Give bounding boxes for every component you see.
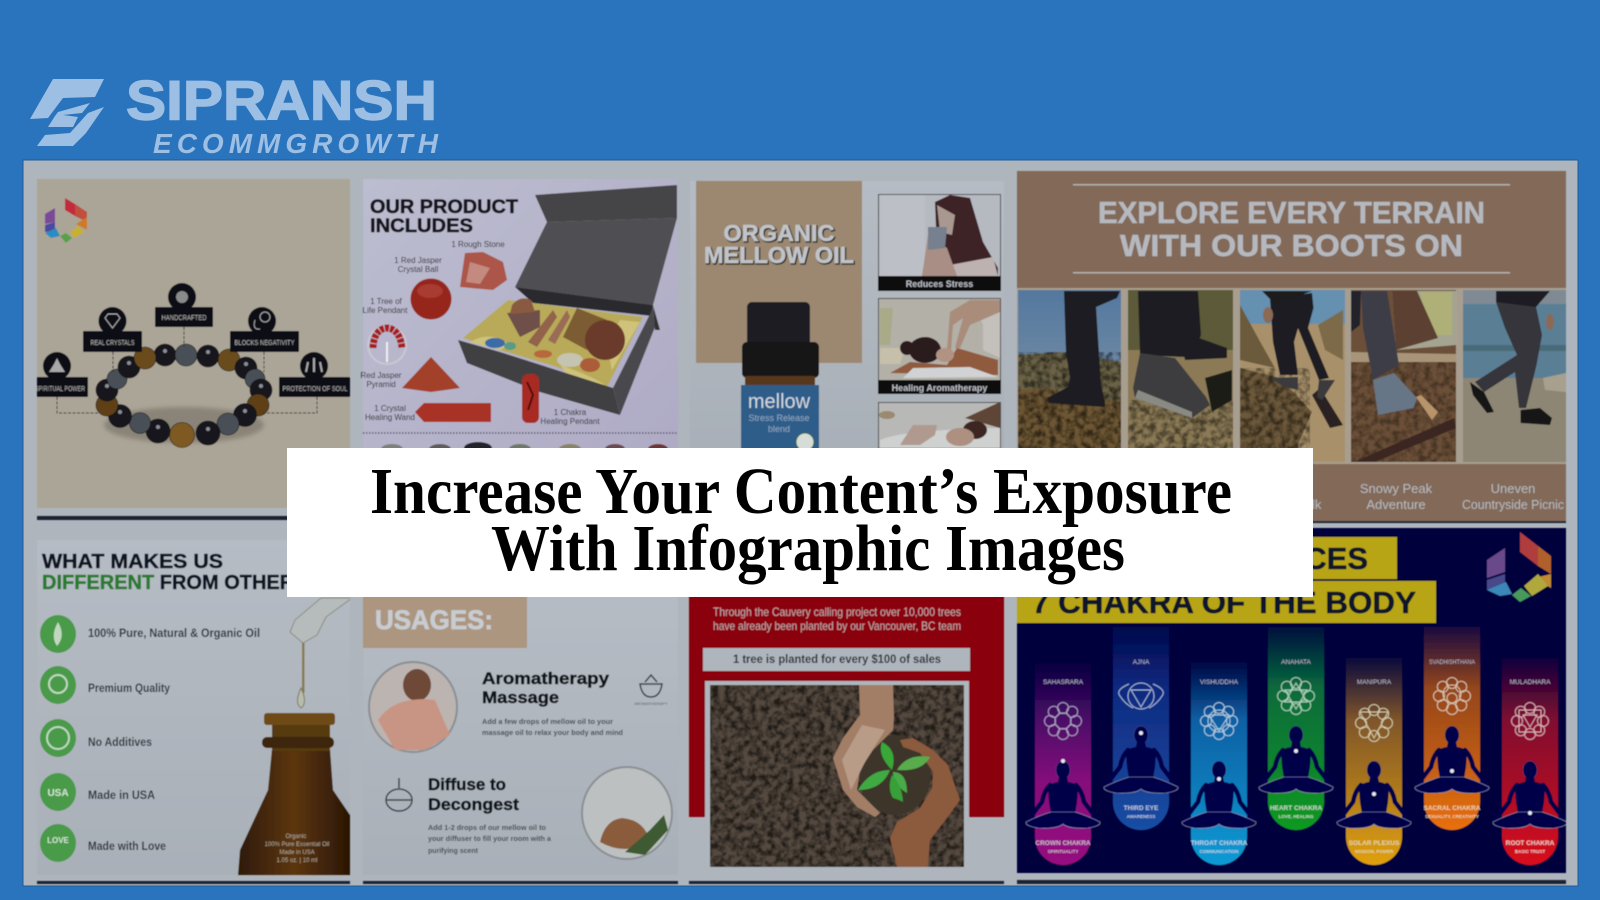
divider: tile 7 underline: [689, 881, 1004, 884]
heading: MELLOW OIL: [704, 242, 854, 268]
banner: yellow top: CES: [1304, 541, 1368, 576]
feature: made with love: [40, 824, 166, 862]
column: sacral chakra: SEXUALITY, CREATIVITY: [1425, 814, 1479, 819]
product: rough stone: [460, 252, 507, 290]
photo 4: [1351, 290, 1456, 462]
text: diffuse to decongest: Decongest: [428, 795, 519, 814]
product: red ball: [410, 278, 452, 320]
column: crown chakra: CROWN CHAKRA: [1035, 840, 1091, 847]
column: solar plexus chakra: [1337, 658, 1411, 865]
product: tree of life pendant: [368, 326, 406, 364]
tile: product includes: [361, 179, 678, 509]
column: sacral chakra: SVADHISHTHANA: [1429, 659, 1476, 666]
column: heart chakra: [1259, 627, 1333, 830]
feature: premium quality: [40, 666, 170, 704]
bottle label: mellow: [748, 391, 811, 413]
column: root chakra: BASIC TRUST: [1515, 849, 1545, 854]
callout: handcrafted: HANDCRAFTED: [162, 315, 206, 322]
heading line 2: INCLUDES: [370, 216, 473, 237]
column: third eye chakra: AWARENESS: [1127, 814, 1155, 819]
text: diffuse to decongest: [428, 775, 519, 814]
text: aromatherapy massage: Massage: [482, 688, 559, 707]
caption: snowy peak adventure: Adventure: [1366, 497, 1426, 512]
connectors: [57, 327, 317, 413]
feature: no additives: No Additives: [88, 735, 152, 749]
heading: USAGES:: [375, 605, 493, 635]
text: aromatherapy massage: Aromatherapy: [482, 669, 610, 688]
heading shadow: MELLOW OIL: [705, 243, 855, 269]
column: third eye chakra: AJNA: [1133, 659, 1150, 666]
gift box: [458, 185, 677, 415]
divider: tile 8 underline: [1017, 880, 1566, 884]
title line 2: With Infographic Images: [491, 512, 1125, 585]
rule under tile: [1017, 521, 1566, 523]
column: throat chakra: [1182, 658, 1256, 865]
feature: made in usa: [40, 773, 155, 811]
photo 1: [1018, 290, 1121, 462]
feature: made with love: Made with Love: [88, 839, 166, 853]
heading: OUR PRODUCT: [370, 197, 518, 218]
product labels: Pyramid: [366, 380, 396, 389]
feature: pure natural organic: [40, 615, 260, 653]
bottle small print: [265, 834, 329, 864]
product labels: 1 Chakra: [554, 408, 587, 417]
photo strip backing: [1017, 288, 1566, 464]
icon: aroma bowl: [634, 675, 668, 706]
column: solar plexus chakra: MANIPURA: [1357, 679, 1392, 686]
description: [713, 605, 961, 633]
callout: real crystals: [83, 307, 142, 352]
text: diffuse to decongest: Diffuse to: [428, 775, 506, 794]
text: massage description: Add a few drops of mellow oil to your: [482, 719, 613, 726]
photo: hands and seedling: [705, 681, 969, 868]
heading line 2: WITH OUR BOOTS ON: [1120, 228, 1463, 263]
logo: Sipransh Ecommgrowth: [30, 68, 439, 159]
divider: tile 1 underline: [37, 516, 678, 520]
banner: 1 tree per $100: [703, 648, 970, 671]
description: have already been planted by our Vancouver, BC team: [713, 619, 961, 633]
heading: [704, 220, 854, 268]
feature: made in usa: Made in USA: [88, 788, 155, 802]
icon: colourful hexagon logo: [45, 198, 87, 243]
heading shadow: ORGANIC: [724, 221, 836, 247]
title line 1: Increase Your Content’s Exposure: [370, 455, 1232, 528]
tile: what makes us different: [37, 540, 352, 875]
thumbnail: sleep: [878, 402, 1000, 448]
callout: blocks negativity: BLOCKS NEGATIVITY: [234, 340, 295, 347]
caption: uneven countryside picnic: Countryside Picnic: [1462, 497, 1564, 512]
icon: colourful hexagon logo: [1487, 532, 1551, 602]
product labels: 1 Crystal: [374, 404, 406, 413]
panel: gallery backdrop: [23, 160, 1578, 886]
thumbnail: reduces stress: [878, 194, 1001, 291]
wordmark: SIPRANSH: [126, 68, 437, 132]
column: crown chakra: [1026, 658, 1100, 865]
bottle small print: 100% Pure Essential Oil: [265, 842, 329, 848]
heading line 2: DIFFERENT FROM OTHERS: [42, 572, 308, 594]
oil bottle: [741, 302, 819, 456]
product labels: Red Jasper: [361, 371, 402, 380]
divider: tile 5 underline: [37, 881, 350, 884]
text: massage description: massage oil to relax your body and mind: [482, 730, 623, 737]
caption: uneven countryside picnic: Uneven: [1491, 481, 1535, 496]
tan heading block: [363, 590, 527, 648]
text: diffuser description: your diffuser to fill your room with a: [428, 836, 551, 843]
product labels: Healing Pendant: [540, 417, 600, 426]
callout: blocks negativity: [230, 307, 299, 352]
banner: 7 chakra of the body: 7 CHAKRA OF THE BODY: [1032, 585, 1416, 620]
caption: uneven countryside picnic: [1462, 481, 1564, 512]
tile: organic mellow oil: [690, 181, 1004, 456]
heading: ORGANIC: [724, 220, 834, 246]
text: aromatherapy massage: [482, 669, 610, 707]
text: diffuser description: purifying scent: [428, 848, 479, 855]
feature: no additives: [40, 719, 152, 757]
text: diffuser description: [428, 825, 551, 855]
bottle small print: 1.05 oz. | 10 ml: [277, 858, 317, 864]
product: pyramid: [402, 357, 460, 392]
column: heart chakra: LOVE, HEALING: [1278, 814, 1314, 819]
image: diffuser circle: [582, 767, 672, 859]
product labels: Crystal Ball: [398, 265, 438, 274]
tile: seven chakras: [1017, 528, 1567, 873]
thumbnail: healing aromatherapy: [878, 298, 1001, 394]
organic seal: [796, 433, 814, 451]
product labels: [361, 240, 600, 426]
column: root chakra: [1493, 658, 1567, 865]
column: sacral chakra: [1415, 627, 1489, 830]
divider: tile 3 underline: [689, 516, 1004, 520]
caption: snowy peak adventure: Snowy Peak: [1360, 481, 1433, 496]
caption: walk fragment: lk: [1312, 497, 1322, 512]
column: heart chakra: ANAHATA: [1281, 659, 1312, 666]
bracelet: [96, 344, 272, 448]
photo 2: [1128, 290, 1233, 462]
thumbnail: reduces stress: Reduces Stress: [906, 279, 973, 289]
column: sacral chakra: SACRAL CHAKRA: [1424, 805, 1481, 812]
feature: made in usa: USA: [47, 788, 69, 799]
product labels: Healing Wand: [365, 413, 415, 422]
rule top: [1073, 184, 1510, 186]
product labels: Life Pendant: [363, 306, 408, 315]
rule bottom: [1073, 272, 1510, 274]
heading shadow: [705, 221, 855, 269]
text: massage description: [482, 719, 623, 737]
photo 3: [1240, 290, 1345, 462]
dropper and oil drop: [290, 598, 352, 708]
callout: spiritual power: SPIRITUAL POWER: [35, 386, 85, 393]
callout: handcrafted: [155, 283, 213, 327]
banner: 1 tree per $100: 1 tree is planted for every $100 of sales: [733, 652, 941, 666]
column: solar plexus chakra: SOLAR PLEXUS: [1349, 840, 1400, 847]
callout: protection of soul: [279, 352, 350, 397]
column: crown chakra: SAHASRARA: [1043, 679, 1084, 686]
feature: premium quality: Premium Quality: [88, 681, 170, 695]
column: throat chakra: VISHUDDHA: [1200, 679, 1239, 686]
caption: snowy peak adventure: [1360, 481, 1433, 512]
column: throat chakra: COMMUNICATION: [1200, 849, 1238, 854]
crystal row: [381, 442, 668, 454]
dotted divider: [363, 432, 678, 434]
bottle sublabel: Stress Release: [748, 413, 810, 423]
product: healing wand: [415, 403, 491, 422]
panel: gallery tiles: [30, 171, 1567, 884]
icon: aroma bowl: AROMATHERAPY: [634, 701, 668, 706]
column: heart chakra: HEART CHAKRA: [1270, 805, 1322, 812]
heading line 1: WHAT MAKES US: [42, 551, 223, 573]
title banner: [287, 448, 1313, 597]
image: massage circle: [369, 662, 457, 752]
icon: diffuser: [386, 778, 412, 811]
divider: tile 6 underline: [363, 881, 678, 884]
product labels: 1 Red Jasper: [394, 256, 442, 265]
product: chakra pendant: [522, 374, 539, 423]
photo 5: [1463, 290, 1566, 462]
amber bottle: [238, 713, 350, 875]
column: crown chakra: SPIRITUALITY: [1048, 849, 1078, 854]
product labels: 1 Rough Stone: [451, 240, 505, 249]
feature: made with love: LOVE: [47, 836, 70, 845]
callout: spiritual power: [30, 352, 88, 397]
feature: pure natural organic: 100% Pure, Natural & Organic Oil: [88, 626, 260, 640]
column: root chakra: MULADHARA: [1510, 679, 1551, 686]
bottle sublabel 2: blend: [768, 424, 790, 434]
tile: multiple usages: [363, 590, 678, 875]
text: diffuser description: Add 1-2 drops of our mellow oil to: [428, 825, 546, 832]
column: third eye chakra: THIRD EYE: [1124, 805, 1159, 812]
banner: yellow top: [1313, 536, 1398, 580]
tagline: ECOMMGROWTH: [153, 128, 439, 159]
bottle small print: Organic: [285, 834, 307, 840]
heading line 1: EXPLORE EVERY TERRAIN: [1098, 195, 1485, 230]
column: throat chakra: THROAT CHAKRA: [1191, 840, 1248, 847]
callout: real crystals: REAL CRYSTALS: [90, 340, 135, 347]
tile: bracelet infographic: [30, 179, 350, 508]
description: Through the Cauvery calling project over 10,000 trees: [713, 605, 961, 619]
column: third eye chakra: [1104, 627, 1178, 830]
brown header block: [696, 181, 862, 363]
tile: explore every terrain: [1017, 171, 1566, 523]
thumbnail: healing aromatherapy: Healing Aromatherapy: [892, 383, 987, 393]
product labels: 1 Tree of: [370, 297, 403, 306]
column: root chakra: ROOT CHAKRA: [1506, 840, 1555, 847]
column: solar plexus chakra: WISDOM, POWER: [1355, 849, 1394, 854]
callout: protection of soul: PROTECTION OF SOUL: [282, 386, 348, 393]
bottle small print: Made in USA: [279, 850, 315, 856]
tile: tree planting: [689, 590, 1004, 868]
icon: S mark: [30, 79, 104, 146]
